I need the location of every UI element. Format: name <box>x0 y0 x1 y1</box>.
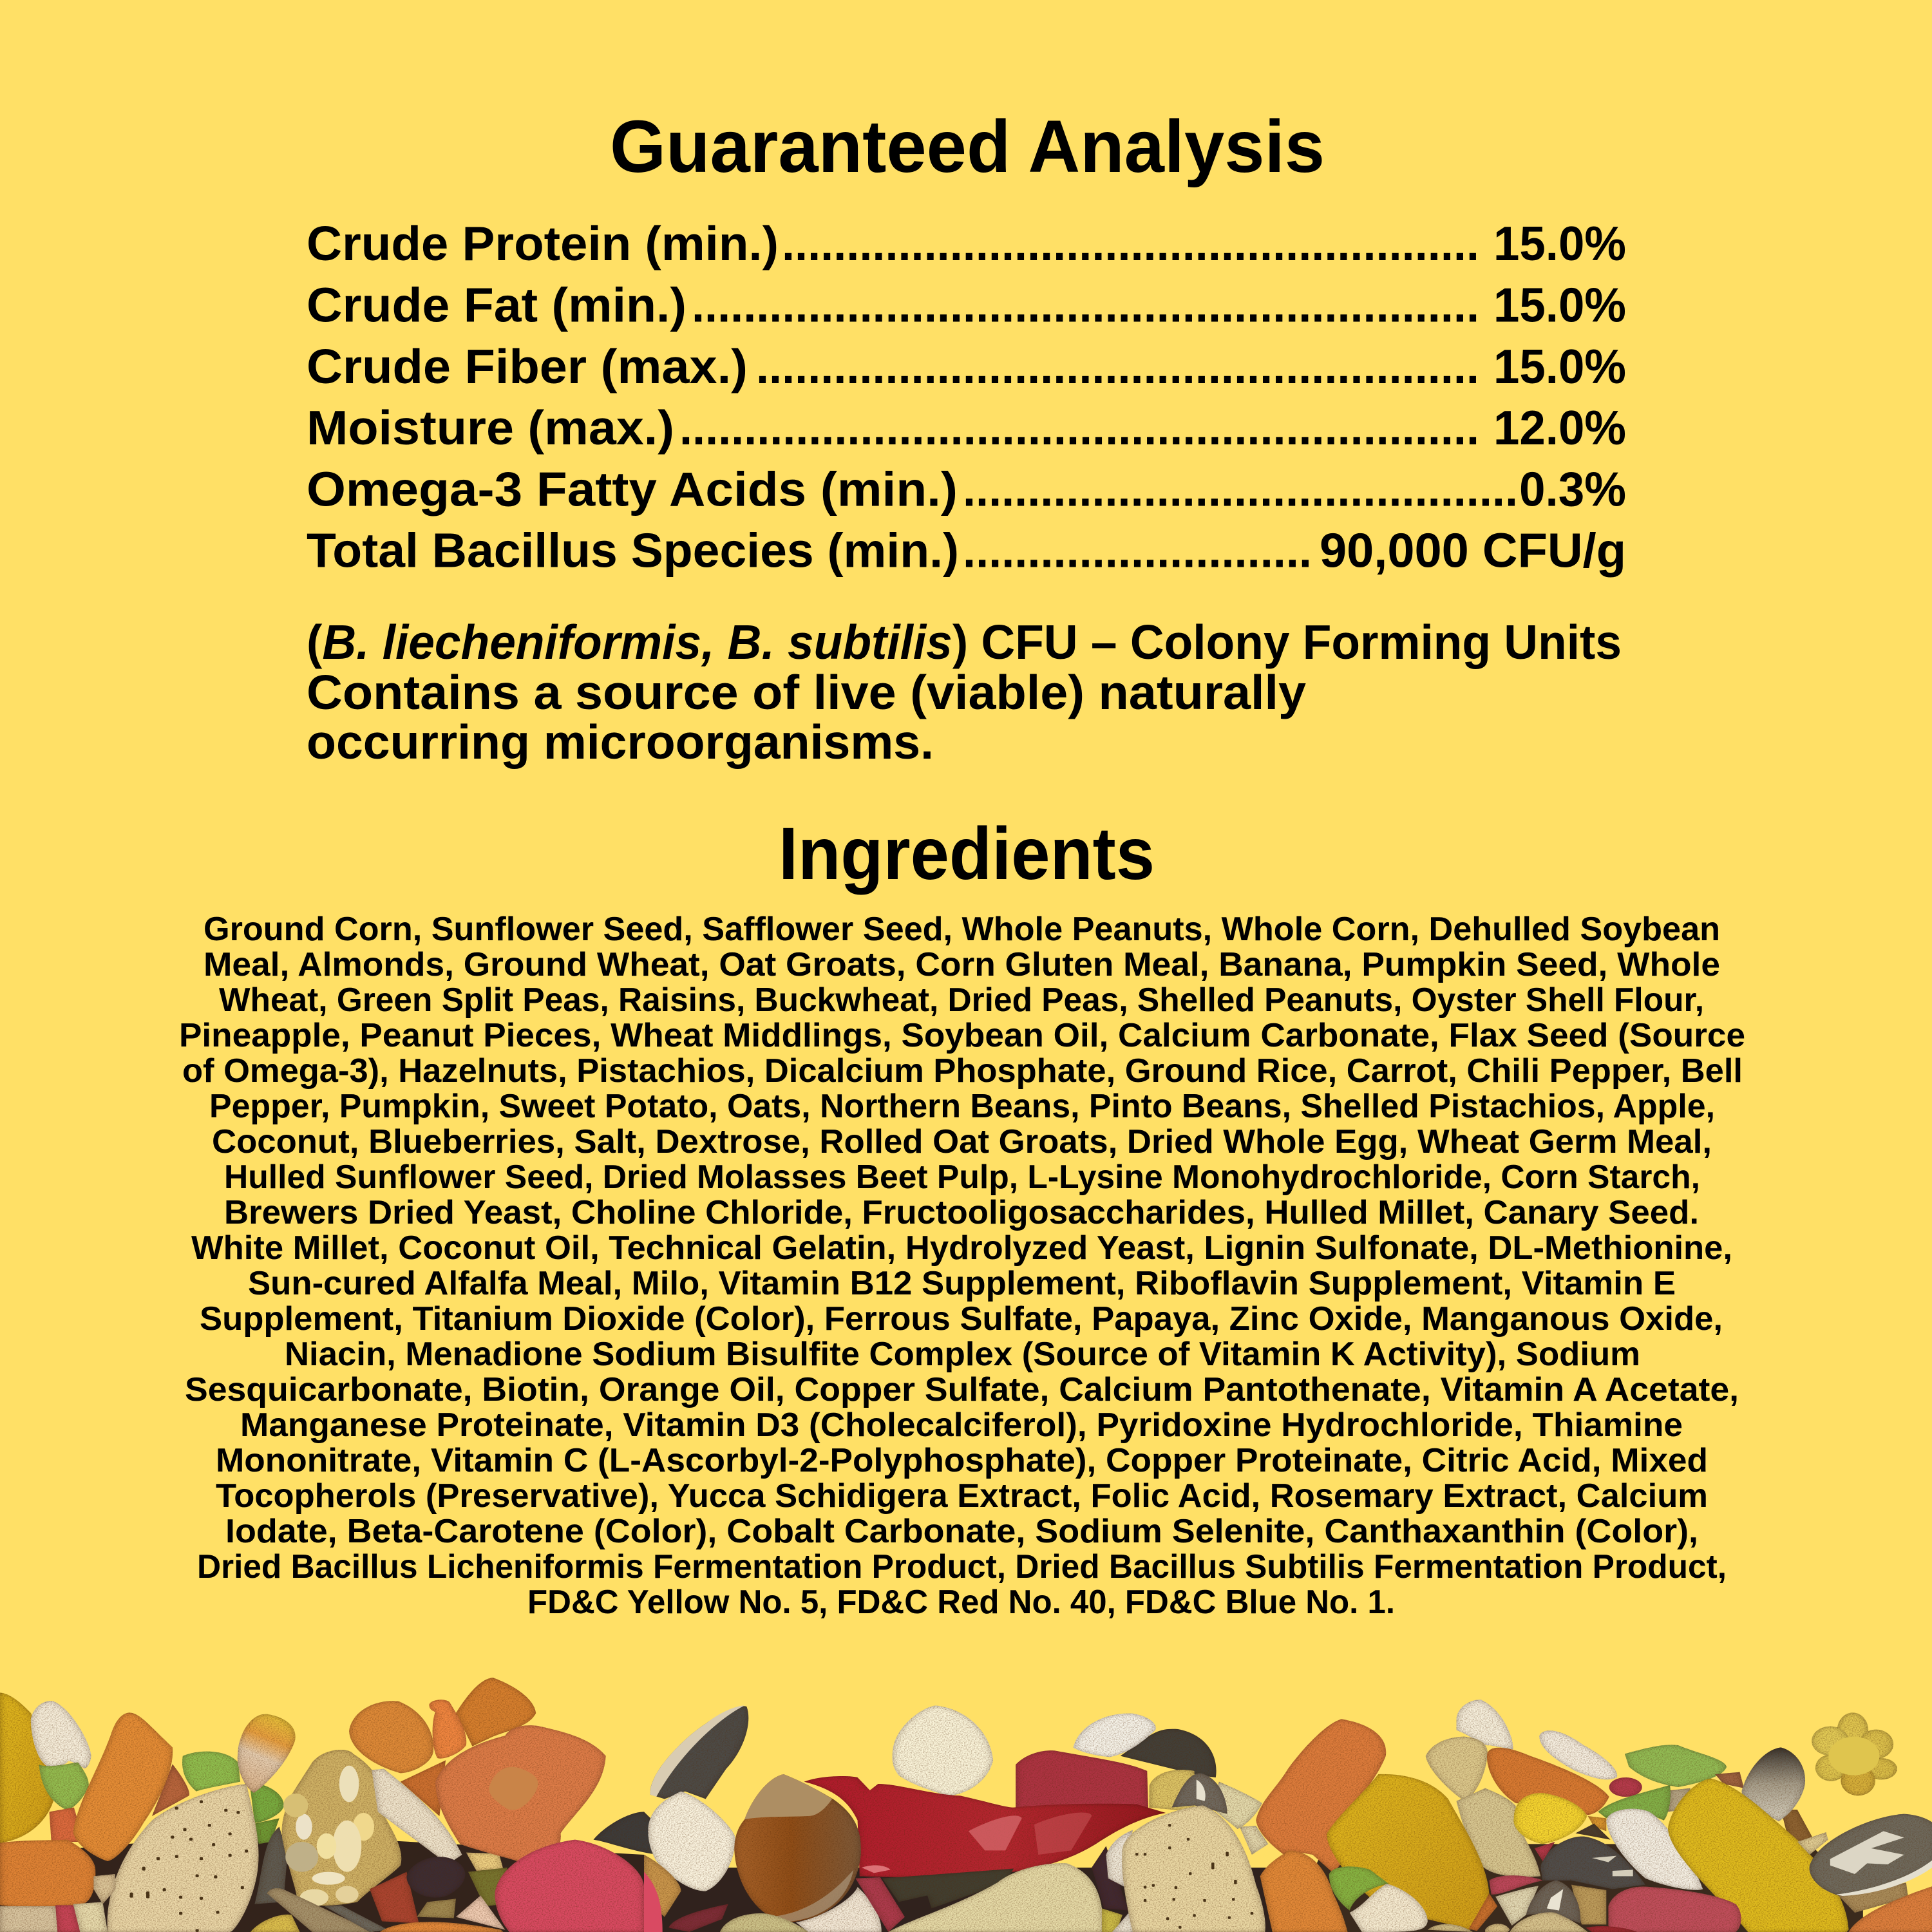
text block: ingredients list: Mononitrate, Vitamin C (L-Ascorbyl-2-Polyphosphate), Copper Proteinate, Citric Acid, Mixed <box>216 1442 1708 1479</box>
chunks <box>1149 1770 1195 1812</box>
text block: bacillus note: Contains a source of live (viable) naturally <box>307 665 1306 719</box>
pellet: olive big <box>1327 1774 1490 1930</box>
pellet: orange block <box>0 1840 95 1907</box>
row: crude fiber: Crude Fiber (max.) <box>307 339 748 393</box>
text block: ingredients list: Pepper, Pumpkin, Sweet Potato, Oats, Northern Beans, Pinto Beans, Shelled Pistachios, Apple, <box>209 1088 1715 1125</box>
green crumb 2 <box>1598 1785 1671 1821</box>
row: moisture: 12.0% <box>1493 401 1626 455</box>
row: omega-3 <box>307 462 1626 516</box>
white seed top <box>1456 1700 1513 1750</box>
row: total bacillus <box>307 523 1626 577</box>
white nut <box>796 1887 882 1932</box>
back chunk <box>152 1764 189 1816</box>
text block: ingredients list: White Millet, Coconut Oil, Technical Gelatin, Hydrolyzed Yeast, Lignin Sulfonate, DL-Methionine, <box>191 1229 1732 1267</box>
green small <box>1329 1866 1388 1911</box>
pellet: orange lower <box>1260 1850 1347 1932</box>
seed: white 2 <box>1539 1730 1617 1779</box>
small peanut <box>720 1913 808 1932</box>
tan chunks <box>1571 1885 1606 1924</box>
row: crude protein: ...................................................... <box>782 216 1479 270</box>
seed: grey right <box>1810 1814 1932 1895</box>
row: crude protein: 15.0% <box>1493 216 1626 270</box>
pellet: orange bottom right <box>1849 1885 1932 1932</box>
row: omega-3: 0.3% <box>1519 462 1626 516</box>
pellet: olive left <box>0 1692 53 1843</box>
row: crude fat: ............................................................. <box>692 278 1479 332</box>
text block: ingredients list: Meal, Almonds, Ground Wheat, Oat Groats, Corn Gluten Meal, Banana, Pumpkin Seed, Whole <box>204 946 1720 983</box>
text block: ingredients list: Coconut, Blueberries, Salt, Dextrose, Rolled Oat Groats, Dried Whole Egg, Wheat Germ Meal, <box>212 1123 1712 1160</box>
red stick <box>855 1877 905 1932</box>
almond pits right <box>1137 1824 1252 1928</box>
striped small seed <box>1526 1880 1580 1924</box>
small red ball <box>1609 1777 1642 1797</box>
pellet: green left <box>39 1763 89 1810</box>
row: crude fat: 15.0% <box>1493 278 1626 332</box>
brown chunk <box>1781 1810 1814 1842</box>
row: moisture: Moisture (max.) <box>307 401 674 455</box>
seed: white peanut half <box>31 1701 91 1768</box>
row: total bacillus: ........................... <box>963 523 1312 577</box>
seed: dark top <box>594 1812 657 1855</box>
row: crude protein: Crude Protein (min.) <box>307 216 779 270</box>
pill: white big <box>1606 1809 1703 1890</box>
corn kernel <box>238 1714 296 1793</box>
pellet: red back <box>50 1808 84 1842</box>
row: omega-3: Omega-3 Fatty Acids (min.) <box>307 462 958 516</box>
pineapple chunk <box>1426 1737 1488 1801</box>
red crumb <box>1490 1875 1542 1895</box>
text block: ingredients list <box>179 911 1745 1621</box>
row: crude fiber <box>307 339 1626 393</box>
back orange <box>401 1760 446 1816</box>
pellet: orange mid <box>1487 1748 1609 1815</box>
almond pits <box>131 1801 247 1931</box>
text block: ingredients list: Pineapple, Peanut Pieces, Wheat Middlings, Soybean Oil, Calcium Carbonate, Flax Seed (Source <box>179 1017 1745 1054</box>
heading: Ingredients: Ingredients <box>779 813 1155 895</box>
pellet: green blob <box>182 1752 240 1792</box>
row: total bacillus: Total Bacillus Species (min.) <box>307 523 959 577</box>
bottom left bits <box>0 1906 62 1932</box>
fruit: red round <box>1016 1750 1148 1812</box>
text block: ingredients list: Manganese Proteinate, Vitamin D3 (Cholecalciferol), Pyridoxine Hydrochloride, Thiamine <box>240 1406 1683 1444</box>
text block: ingredients list: Hulled Sunflower Seed, Dried Molasses Beet Pulp, L-Lysine Monohydrochloride, Corn Starch, <box>224 1159 1700 1196</box>
text block: ingredients list: Brewers Dried Yeast, Choline Chloride, Fructooligosaccharides, Hulled Millet, Canary Seed. <box>224 1194 1699 1231</box>
row: crude fat: Crude Fat (min.) <box>307 278 687 332</box>
text block: ingredients list: Dried Bacillus Licheniformis Fermentation Product, Dried Bacillus Subtilis Fermentation Product, <box>197 1548 1727 1586</box>
pellet: orange round <box>349 1701 433 1773</box>
almond right <box>1122 1805 1265 1932</box>
text block: bacillus note <box>307 615 1622 769</box>
raisin and fruit bits <box>370 1872 419 1924</box>
text block: ingredients list: of Omega-3), Hazelnuts, Pistachios, Dicalcium Phosphate, Ground Rice, Carrot, Chili Pepper, Bell <box>182 1052 1743 1090</box>
seed: grey sliver <box>254 1827 287 1904</box>
peanut white <box>1350 1884 1428 1932</box>
text block: ingredients list: Ground Corn, Sunflower Seed, Safflower Seed, Whole Peanuts, Whole Corn, Dehulled Soybean <box>204 911 1720 948</box>
text block: ingredients list: Wheat, Green Split Peas, Raisins, Buckwheat, Dried Peas, Shelled Peanuts, Oyster Shell Flour, <box>219 981 1704 1019</box>
sunflower seed <box>650 1706 748 1799</box>
left edge bits <box>644 1855 681 1917</box>
dark seed under chili <box>882 1869 1014 1908</box>
text block: ingredients list: FD&C Yellow No. 5, FD&C Red No. 40, FD&C Blue No. 1. <box>527 1584 1395 1621</box>
food group: left section <box>0 1678 657 1932</box>
corn yellow <box>1513 1793 1587 1844</box>
popcorn left <box>648 1792 735 1891</box>
pellet: orange top <box>456 1678 536 1747</box>
text block: bacillus note: occurring microorganisms. <box>307 715 934 769</box>
tan nut <box>1510 1912 1588 1932</box>
pellet: yellow long <box>1668 1779 1849 1932</box>
peanut <box>888 1863 1103 1932</box>
pellet: green right <box>251 1785 284 1823</box>
dried carrot <box>435 1725 606 1866</box>
green crumb <box>1625 1745 1727 1787</box>
text block: ingredients list: Sun-cured Alfalfa Meal, Milo, Vitamin B12 Supplement, Riboflavin Supplement, Vitamin E <box>248 1265 1676 1302</box>
row: moisture <box>307 401 1626 455</box>
food group: right section <box>1256 1700 1932 1932</box>
text block: ingredients list: Tocopherols (Preservative), Yucca Schidigera Extract, Folic Acid, Rosemary Extract, Calcium <box>216 1477 1708 1515</box>
brown back right <box>1839 1882 1908 1913</box>
row: crude protein <box>307 216 1626 270</box>
orange bottom <box>380 1922 503 1932</box>
raisin <box>1092 1846 1129 1911</box>
row: crude fat <box>307 278 1626 332</box>
panel: food mix strip along bottom <box>0 1678 1932 1932</box>
flower pellet <box>1812 1712 1897 1795</box>
row: omega-3: ........................................... <box>963 462 1518 516</box>
panel: guaranteed analysis table <box>307 216 1626 577</box>
nut: almond left <box>108 1784 259 1932</box>
small tan <box>1428 1924 1473 1932</box>
hazelnut <box>734 1774 861 1922</box>
seed: dark round <box>1540 1837 1645 1889</box>
row: total bacillus: 90,000 CFU/g <box>1320 523 1626 577</box>
popcorn ball <box>892 1705 993 1795</box>
food group: middle section <box>644 1705 1288 1932</box>
text block: ingredients list: Niacin, Menadione Sodium Bisulfite Complex (Source of Vitamin K Activity), Sodium <box>285 1336 1640 1373</box>
chili pepper <box>804 1776 1166 1877</box>
seed: striped upright <box>1742 1747 1805 1821</box>
beige chunk <box>1456 1788 1540 1877</box>
text block: ingredients list: Supplement, Titanium Dioxide (Color), Ferrous Sulfate, Papaya, Zinc Oxide, Manganous Oxide, <box>200 1300 1723 1338</box>
pill: white <box>1073 1713 1156 1757</box>
carrot small <box>429 1700 466 1759</box>
seed: dark striped <box>1121 1729 1217 1777</box>
stick: brown <box>267 1888 374 1932</box>
title: Guaranteed Analysis: Guaranteed Analysis <box>610 106 1325 188</box>
seed cluster bar <box>282 1750 401 1906</box>
fruit: pink round <box>495 1840 644 1932</box>
red round bottom <box>1608 1886 1741 1932</box>
white stick <box>372 1769 462 1864</box>
text block: ingredients list: Sesquicarbonate, Biotin, Orange Oil, Copper Sulfate, Calcium Pantothenate, Vitamin A Acetate, <box>185 1371 1739 1408</box>
pellet: orange tall <box>73 1712 173 1861</box>
row: crude fiber: 15.0% <box>1493 339 1626 393</box>
text block: bacillus note: (B. liecheniformis, B. subtilis) CFU – Colony Forming Units <box>307 615 1622 669</box>
row: moisture: .............................................................. <box>679 401 1479 455</box>
seed: striped small <box>1172 1773 1227 1814</box>
row: crude fiber: ........................................................ <box>756 339 1479 393</box>
coconut sliver <box>1106 1830 1133 1887</box>
pellet: orange long <box>1256 1719 1386 1873</box>
text block: ingredients list: Iodate, Beta-Carotene (Color), Cobalt Carbonate, Sodium Selenite, Canthaxanthin (Color), <box>225 1513 1698 1550</box>
